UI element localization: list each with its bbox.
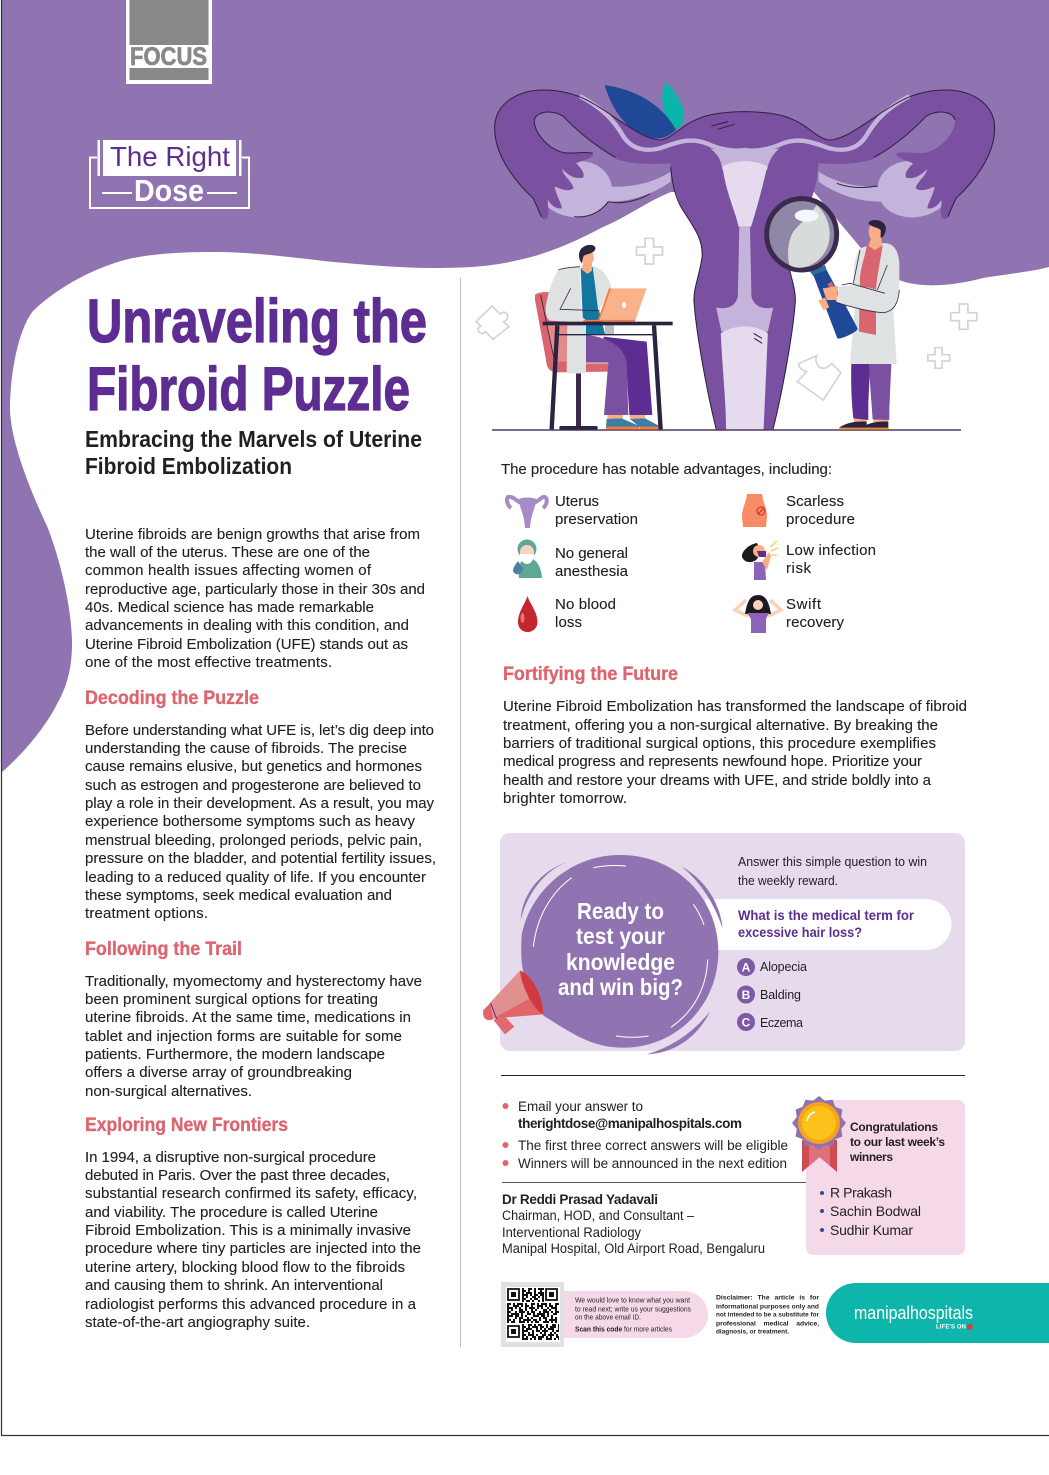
answer options: Eczema xyxy=(760,1016,803,1030)
feedback pill: on the above email ID. xyxy=(575,1314,641,1322)
congratulations text: Congratulations xyxy=(850,1120,938,1134)
feedback pill: Scan this code for more articles xyxy=(575,1326,672,1334)
manipal hospitals logo band: LIFE'S ON xyxy=(936,1324,966,1330)
manipal hospitals logo band: manipalhospitals xyxy=(854,1302,973,1323)
purple wave background xyxy=(2,0,1049,772)
the right dose logo xyxy=(90,140,249,208)
contest instructions: Email your answer to xyxy=(518,1099,643,1114)
intro paragraph: one of the most effective treatments. xyxy=(85,654,332,671)
paragraph: decoding the puzzle: pressure on the bladder, and potential fertility issues, xyxy=(85,850,436,867)
advantage: low infection risk xyxy=(742,541,876,580)
paragraph: following the trail: tablet and injection forms are suitable for some xyxy=(85,1028,402,1045)
answer options xyxy=(737,958,807,1031)
advantage: scarless procedure: procedure xyxy=(786,511,855,528)
decorative leaves xyxy=(605,82,684,139)
uterus outlines xyxy=(495,90,995,430)
divider under quiz xyxy=(501,1074,965,1076)
winner names: R Prakash xyxy=(830,1184,892,1200)
paragraph: exploring new frontiers xyxy=(85,1149,421,1331)
manipal hospitals logo band xyxy=(826,1283,1049,1343)
disclaimer xyxy=(716,1294,819,1336)
advantage: uterus preservation: Uterus xyxy=(555,493,599,510)
disclaimer: informational purposes only and xyxy=(716,1304,819,1310)
advantage: no blood loss xyxy=(518,596,616,632)
icon: woman with mask xyxy=(742,541,778,580)
uterus inner cavity xyxy=(710,148,779,430)
paragraph: decoding the puzzle: Before understanding what UFE is, let’s dig deep into xyxy=(85,722,434,739)
feedback pill: We would love to know what you want xyxy=(575,1298,690,1304)
bubble text: test your xyxy=(576,923,665,949)
uterus body xyxy=(662,112,827,430)
advantage: scarless procedure xyxy=(742,493,855,528)
paragraph: decoding the puzzle: such as estrogen and progesterone are believed to xyxy=(85,777,421,794)
bubble text: and win big? xyxy=(558,974,683,1000)
answer options: Alopecia xyxy=(760,960,807,974)
paragraph: exploring new frontiers: radiologist performs this advanced procedure in a xyxy=(85,1296,417,1313)
congratulations text xyxy=(849,1120,945,1164)
icon: torso xyxy=(742,494,767,527)
qr code xyxy=(501,1282,564,1347)
paragraph: exploring new frontiers: debuted in Paris. Over the past three decades, xyxy=(85,1167,390,1184)
icon: strong woman xyxy=(735,595,781,633)
quiz question: excessive hair loss? xyxy=(738,925,862,940)
the right dose logo: The Right xyxy=(110,141,230,172)
bubble text: Ready to xyxy=(577,898,664,924)
paragraph: fortifying the future: treatment, offering you a non-surgical alternative. By breaking the xyxy=(503,717,938,734)
winner names: Sudhir Kumar xyxy=(830,1222,913,1238)
floor line xyxy=(492,429,961,431)
the right dose logo: Dose xyxy=(134,173,204,208)
intro paragraph: common health issues affecting women of xyxy=(85,562,372,579)
paragraph: decoding the puzzle: these symptoms, seek medical evaluation and xyxy=(85,887,392,904)
winners panel xyxy=(792,1096,965,1255)
paragraph: fortifying the future xyxy=(503,698,967,807)
quiz instruction: the weekly reward. xyxy=(738,874,838,888)
paragraph: exploring new frontiers: In 1994, a disruptive non-surgical procedure xyxy=(85,1149,376,1166)
paragraph: fortifying the future: brighter tomorrow. xyxy=(503,790,627,807)
advantage: no blood loss: loss xyxy=(555,614,582,631)
paragraph: following the trail: non-surgical alternatives. xyxy=(85,1083,252,1100)
author block: Manipal Hospital, Old Airport Road, Bengaluru xyxy=(502,1241,765,1256)
icon: masked doctor xyxy=(513,540,542,578)
heading: following the trail: Following the Trail xyxy=(85,939,242,960)
light stripe on tubes xyxy=(580,96,910,151)
advantage: low infection risk: Low infection xyxy=(786,542,876,559)
advantage: swift recovery xyxy=(735,595,844,633)
paragraph: decoding the puzzle: understanding the cause of fibroids. The precise xyxy=(85,740,407,757)
author block: Dr Reddi Prasad Yadavali xyxy=(502,1192,658,1207)
subtitle: Embracing the Marvels of Uterine xyxy=(85,426,422,452)
advantage: no blood loss: No blood xyxy=(555,596,616,613)
advantage: uterus preservation xyxy=(507,493,638,528)
disclaimer: Disclaimer: The article is for xyxy=(716,1294,819,1302)
quiz question: What is the medical term for xyxy=(738,908,915,923)
fallopian tubes xyxy=(495,90,995,219)
subtitle xyxy=(85,426,422,479)
advantage: no general anesthesia: anesthesia xyxy=(555,563,629,580)
winner names: Sachin Bodwal xyxy=(830,1203,921,1219)
advantage: scarless procedure: Scarless xyxy=(786,493,844,510)
paragraph: fortifying the future: barriers of traditional surgical options, this procedure exemplifies xyxy=(503,735,936,752)
bubble text xyxy=(558,898,683,1000)
paragraph: exploring new frontiers: substantial research confirmed its safety, efficacy, xyxy=(85,1185,417,1202)
disclaimer: not intended to be a substitute for xyxy=(716,1312,819,1318)
heading: exploring new frontiers: Exploring New Frontiers xyxy=(85,1115,288,1136)
advantage: no general anesthesia: No general xyxy=(555,545,628,562)
paragraph: exploring new frontiers: and causing them to shrink. An interventional xyxy=(85,1277,383,1294)
bubble text: knowledge xyxy=(566,949,675,975)
answer options: A xyxy=(742,960,751,974)
icon: blood drop xyxy=(518,596,538,632)
quiz panel xyxy=(483,833,965,1054)
winner names xyxy=(820,1184,921,1238)
paragraph: fortifying the future: Uterine Fibroid Embolization has transformed the landscape of fibroid xyxy=(503,698,967,715)
feedback pill xyxy=(564,1291,708,1338)
illustration: uterus and doctors xyxy=(476,82,995,430)
paragraph: decoding the puzzle: play a role in their development. As a result, you may xyxy=(85,795,434,812)
paragraph: decoding the puzzle: treatment options. xyxy=(85,905,208,922)
intro paragraph xyxy=(85,526,425,671)
contest instructions: The first three correct answers will be eligible xyxy=(518,1138,788,1153)
title: Unraveling the xyxy=(87,287,427,355)
paragraph: decoding the puzzle: leading to a reduced quality of life. If you encounter xyxy=(85,869,426,886)
advantages intro: The procedure has notable advantages, including: xyxy=(501,461,832,478)
uterus organ xyxy=(495,82,995,430)
contest instructions xyxy=(502,1099,788,1171)
disclaimer: professional medical advice, xyxy=(716,1320,819,1328)
paragraph: following the trail: uterine fibroids. At the same time, medications in xyxy=(85,1009,411,1026)
intro paragraph: advancements in dealing with this condition, and xyxy=(85,617,409,634)
intro paragraph: Uterine fibroids are benign growths that arise from xyxy=(85,526,420,543)
contest instructions: Winners will be announced in the next edition xyxy=(518,1156,787,1171)
paragraph: exploring new frontiers: procedure where tiny particles are injected into the xyxy=(85,1240,421,1257)
intro paragraph: the wall of the uterus. These are one of the xyxy=(85,544,370,561)
paragraph: decoding the puzzle xyxy=(85,722,436,922)
title xyxy=(87,287,427,423)
heading: fortifying the future: Fortifying the Future xyxy=(503,664,678,685)
icon: uterus xyxy=(507,497,547,528)
paragraph: decoding the puzzle: menstrual bleeding, prolonged periods, pelvic pain, xyxy=(85,832,422,849)
paragraph: following the trail: offers a diverse array of groundbreaking xyxy=(85,1064,352,1081)
contest instructions: therightdose@manipalhospitals.com xyxy=(518,1116,742,1131)
congratulations text: winners xyxy=(849,1150,893,1164)
author block: Chairman, HOD, and Consultant – xyxy=(502,1208,694,1223)
title: Fibroid Puzzle xyxy=(87,355,410,423)
paragraph: decoding the puzzle: experience bothersome symptoms such as heavy xyxy=(85,813,416,830)
plus and puzzle outlines xyxy=(476,238,977,368)
congratulations text: to our last week’s xyxy=(850,1135,945,1149)
focus badge xyxy=(126,0,212,84)
column divider xyxy=(460,278,462,1347)
quiz instruction xyxy=(738,855,927,888)
advantage: uterus preservation: preservation xyxy=(555,511,638,528)
paragraph: exploring new frontiers: and viability. The procedure is called Uterine xyxy=(85,1204,378,1221)
paragraph: following the trail: patients. Furthermore, the modern landscape xyxy=(85,1046,385,1063)
author block: Interventional Radiology xyxy=(502,1225,641,1240)
paragraph: exploring new frontiers: Fibroid Embolization. This is a minimally invasive xyxy=(85,1222,411,1239)
quiz instruction: Answer this simple question to win xyxy=(738,855,927,869)
puzzle piece xyxy=(797,356,841,400)
answer options: Balding xyxy=(760,988,801,1002)
paragraph: decoding the puzzle: cause remains elusive, but genetics and hormones xyxy=(85,758,422,775)
subtitle: Fibroid Embolization xyxy=(85,453,292,479)
focus badge: FOCUS xyxy=(130,43,207,71)
feedback pill: to read next; write us your suggestions xyxy=(575,1306,691,1314)
paragraph: exploring new frontiers: state-of-the-art angiography suite. xyxy=(85,1314,310,1331)
paragraph: following the trail: Traditionally, myomectomy and hysterectomy have xyxy=(85,973,422,990)
intro paragraph: reproductive age, particularly those in their 30s and xyxy=(85,581,425,598)
author block xyxy=(502,1192,765,1256)
advantage: no general anesthesia xyxy=(513,540,629,580)
icon: medal xyxy=(792,1096,846,1172)
advantage: low infection risk: risk xyxy=(786,560,812,577)
seated doctor at desk xyxy=(535,245,673,430)
quiz question xyxy=(738,908,915,940)
answer options: C xyxy=(742,1016,751,1030)
answer options: B xyxy=(742,988,751,1002)
paragraph: fortifying the future: health and restore your dreams with UFE, and stride boldly into a xyxy=(503,772,932,789)
paragraph: exploring new frontiers: uterine artery, blocking blood flow to the fibroids xyxy=(85,1259,405,1276)
speech bubble with megaphone xyxy=(483,855,723,1054)
divider above author xyxy=(502,1182,806,1184)
paragraph: following the trail xyxy=(85,973,422,1100)
paragraph: following the trail: been prominent surgical options for treating xyxy=(85,991,378,1008)
heading: decoding the puzzle: Decoding the Puzzle xyxy=(85,688,259,709)
disclaimer: diagnosis, or treatment. xyxy=(716,1328,789,1336)
ovary and ligament xyxy=(547,161,942,217)
intro paragraph: 40s. Medical science has made remarkable xyxy=(85,599,374,616)
question pill xyxy=(705,899,952,950)
advantage: swift recovery: Swift xyxy=(786,596,822,613)
intro paragraph: Uterine Fibroid Embolization (UFE) stands out as xyxy=(85,636,408,653)
paragraph: fortifying the future: medical progress and represents newfound hope. Prioritize your xyxy=(503,753,922,770)
standing doctor with magnifying glass xyxy=(767,199,899,429)
advantage: swift recovery: recovery xyxy=(786,614,844,631)
